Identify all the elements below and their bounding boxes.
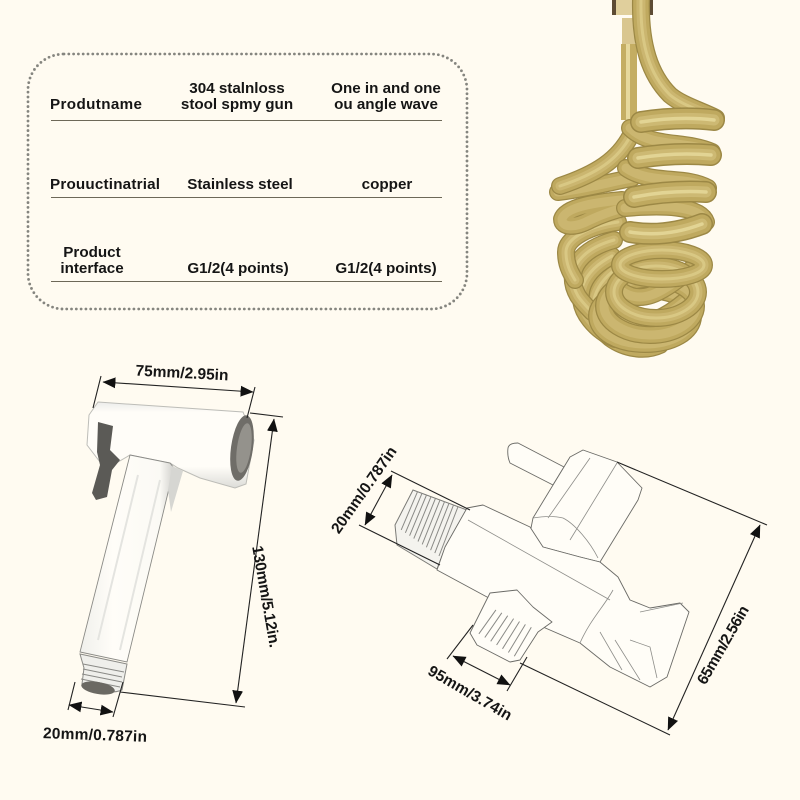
dimension: 65mm valve height: 65mm/2.56in <box>694 603 753 688</box>
handle <box>80 455 174 662</box>
dimension: 65mm valve height <box>520 462 767 735</box>
thread lines <box>81 664 124 687</box>
row: product material: Prouuctinatrial <box>50 176 160 193</box>
row: product name <box>50 80 441 113</box>
inlet thread <box>395 490 467 569</box>
body contours <box>468 520 683 680</box>
dimension: 130mm length <box>120 413 283 707</box>
outlet thread <box>470 590 552 662</box>
spray head <box>87 402 254 488</box>
row: product name: 304 stalnloss <box>189 80 285 97</box>
illustration: gold coiled hose <box>558 0 716 349</box>
valve stem <box>508 443 564 485</box>
nozzle inner <box>234 422 254 474</box>
valve body <box>437 505 689 687</box>
row: product name: Produtname <box>50 96 142 113</box>
outlet thread lines <box>479 610 531 656</box>
dimension: 95mm valve width <box>425 625 527 724</box>
dimension: 20mm valve inlet: 20mm/0.787in <box>328 444 401 537</box>
inlet thread lines <box>401 492 458 556</box>
handle reflections <box>98 475 160 650</box>
dimension: 75mm width: 75mm/2.95in <box>135 363 229 384</box>
row: product name: One in and one <box>331 80 441 97</box>
row: product interface <box>60 244 437 277</box>
dimension: 20mm thread <box>43 682 147 746</box>
icon: trigger lever <box>92 422 120 500</box>
row: product material <box>50 176 412 193</box>
row: product name: stool spmy gun <box>181 96 293 113</box>
dimension: 95mm valve width: 95mm/3.74in <box>425 663 515 724</box>
dimension: 75mm width <box>93 363 255 418</box>
illustration: angle valve <box>395 443 689 687</box>
thread opening <box>80 679 116 697</box>
row: product material: copper <box>362 176 412 193</box>
row: product interface: Product <box>63 244 121 261</box>
dimension: 20mm thread: 20mm/0.787in <box>43 725 147 746</box>
thread connector <box>80 654 127 692</box>
row: product material: Stainless steel <box>187 176 293 193</box>
dimension: 20mm valve inlet <box>328 444 470 565</box>
collar shadow <box>168 466 183 512</box>
row: product interface: interface <box>60 260 124 277</box>
dimension: 130mm length: 130mm/5.12in. <box>248 545 283 649</box>
illustration: chrome spray gun <box>80 402 257 697</box>
valve handle cylinder <box>530 450 642 562</box>
nozzle face <box>227 414 257 482</box>
handle contours <box>533 458 617 558</box>
row: product interface: G1/2(4 points) <box>335 260 437 277</box>
row: product name: ou angle wave <box>334 96 438 113</box>
row: product interface: G1/2(4 points) <box>187 260 289 277</box>
panel: specification table <box>28 54 467 309</box>
